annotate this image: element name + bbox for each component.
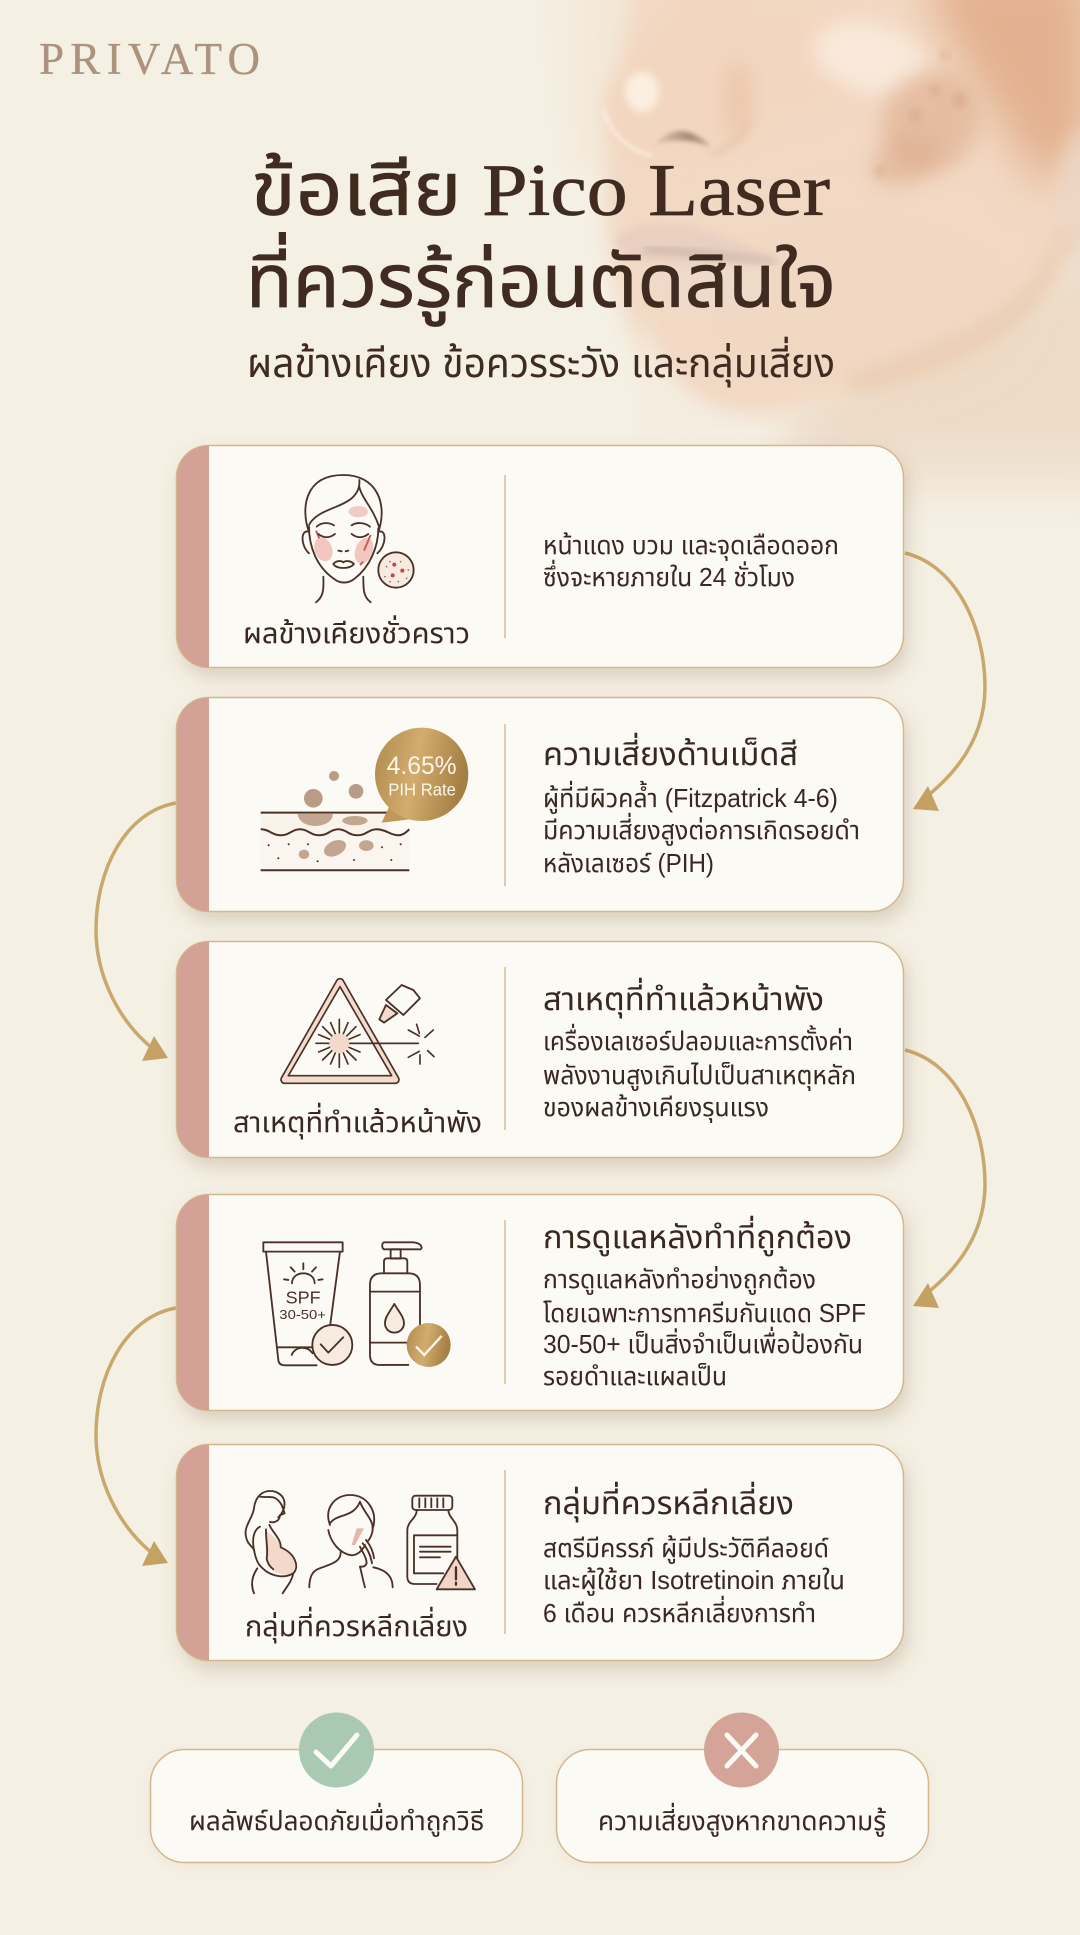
- body text: [543, 1533, 845, 1628]
- callout: safe result: [150, 1712, 522, 1862]
- heading: กลุ่มที่ควรหลีกเลี่ยง: [543, 1481, 794, 1522]
- body text: [543, 1023, 856, 1123]
- face photo background: [500, 0, 1080, 560]
- body text: 30-50+ เป็นสิ่งจำเป็นเพื่อป้องกัน: [543, 1326, 863, 1359]
- icon: sunscreen and bottle: 30-50+: [279, 1308, 326, 1322]
- body text: รอยดำและแผลเป็น: [543, 1361, 727, 1391]
- body text: ของผลข้างเคียงรุนแรง: [543, 1092, 769, 1123]
- panel: temporary side effects: [176, 446, 904, 668]
- body text: ผู้ที่มีผิวคล้ำ (Fitzpatrick 4-6): [543, 780, 838, 814]
- heading: สาเหตุที่ทำแล้วหน้าพัง: [543, 977, 824, 1018]
- body text: เครื่องเลเซอร์ปลอมและการตั้งค่า: [543, 1023, 853, 1056]
- body text: ซึ่งจะหายภายใน 24 ชั่วโมง: [543, 559, 795, 592]
- icon: skin layers with pigment: [261, 728, 468, 870]
- heading: ความเสี่ยงด้านเม็ดสี: [543, 732, 798, 772]
- left fade over face: [548, 0, 554, 14]
- icon: cross circle: [704, 1712, 779, 1788]
- chin: [644, 338, 709, 410]
- label: กลุ่มที่ควรหลีกเลี่ยง: [245, 1606, 468, 1643]
- icon: sunscreen and bottle: [263, 1242, 451, 1367]
- title: [246, 150, 836, 326]
- body text: หลังเลเซอร์ (PIH): [543, 848, 714, 878]
- body text: สตรีมีครรภ์ ผู้มีประวัติคีลอยด์: [543, 1533, 829, 1564]
- icon: face with redness: [303, 475, 414, 602]
- panel: aftercare: [176, 1194, 904, 1410]
- heading: การดูแลหลังทำที่ถูกต้อง: [543, 1215, 852, 1257]
- arrow: card 4 to card 5: [96, 1308, 176, 1566]
- lips: [618, 228, 750, 258]
- panel: causes of damage: [176, 942, 904, 1158]
- arrow: card 3 to card 4: [905, 1050, 985, 1308]
- callout: risk: ความเสี่ยงสูงหากขาดความรู้: [598, 1802, 886, 1837]
- bottom fade over face: [901, 461, 1080, 502]
- body text: หน้าแดง บวม และจุดเลือดออก: [543, 530, 839, 561]
- body text: และผู้ใช้ยา Isotretinoin ภายใน: [543, 1565, 845, 1596]
- title: ข้อเสีย Pico Laser: [251, 150, 830, 232]
- arrow: card 2 to card 3: [96, 803, 176, 1061]
- subtitle: ผลข้างเคียง ข้อควรระวัง และกลุ่มเสี่ยง: [247, 336, 835, 387]
- icon: skin layers with pigment: PIH Rate: [388, 780, 456, 800]
- icon: skin layers with pigment: 4.65%: [387, 752, 457, 780]
- callout: risk: [556, 1712, 928, 1862]
- body text: [543, 1264, 866, 1391]
- title: ที่ควรรู้ก่อนตัดสินใจ: [246, 232, 836, 326]
- body text: การดูแลหลังทำอย่างถูกต้อง: [543, 1264, 816, 1295]
- label: สาเหตุที่ทำแล้วหน้าพัง: [233, 1102, 482, 1139]
- icon: check circle: [299, 1712, 374, 1788]
- body text: มีความเสี่ยงสูงต่อการเกิดรอยดำ: [543, 812, 860, 846]
- callout: safe result: ผลลัพธ์ปลอดภัยเมื่อทำถูกวิธี: [189, 1802, 484, 1837]
- label: ผลข้างเคียงชั่วคราว: [243, 615, 470, 650]
- arrow: card 1 to card 2: [905, 553, 985, 811]
- body text: [543, 780, 860, 878]
- body text: พลังงานสูงเกินไปเป็นสาเหตุหลัก: [543, 1060, 856, 1091]
- panel: groups to avoid: [176, 1444, 904, 1660]
- pigmentation: [875, 64, 983, 178]
- body text: โดยเฉพาะการทาครีมกันแดด SPF: [543, 1298, 866, 1328]
- logo: PRIVATO: [39, 34, 260, 84]
- panel: pigment risk: [176, 698, 904, 912]
- icon: pregnant woman, patient, medicine: [246, 1491, 475, 1593]
- body text: [543, 530, 839, 592]
- nose: [604, 84, 622, 126]
- icon: sunscreen and bottle: SPF: [286, 1287, 321, 1307]
- body text: 6 เดือน ควรหลีกเลี่ยงการทำ: [543, 1595, 816, 1628]
- icon: laser warning triangle: [285, 982, 434, 1080]
